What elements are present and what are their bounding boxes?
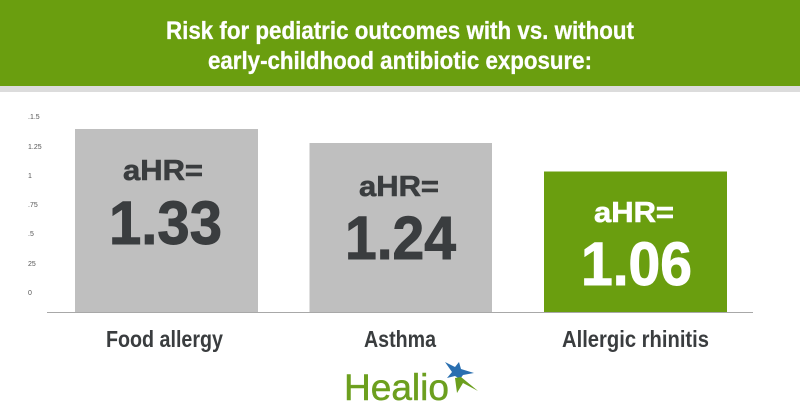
- bar: allergic rhinitis: aHR=: [594, 197, 674, 229]
- y axis labels: 1.25: [28, 144, 42, 151]
- Healio logo: Healio: [344, 367, 449, 408]
- title: early-childhood antibiotic exposure:: [208, 47, 592, 75]
- header banner: [0, 0, 800, 92]
- category label: allergic rhinitis: Allergic rhinitis: [562, 326, 709, 352]
- y axis labels: 25: [28, 261, 36, 268]
- bar: food allergy: [75, 129, 258, 312]
- y axis labels: .1.5: [28, 114, 40, 121]
- y axis labels: [28, 114, 42, 297]
- icon: logo star: [445, 362, 478, 393]
- bar: asthma: 1.24: [345, 204, 456, 272]
- bar: asthma: [310, 143, 492, 312]
- Healio logo: [344, 362, 478, 408]
- bar: allergic rhinitis: 1.06: [581, 230, 692, 298]
- x axis line: [47, 312, 753, 313]
- category label: food allergy: Food allergy: [106, 326, 223, 352]
- bar: food allergy: aHR=: [123, 155, 203, 187]
- category label: asthma: Asthma: [364, 326, 436, 352]
- bar: food allergy: 1.33: [109, 189, 222, 257]
- bar: allergic rhinitis: [544, 172, 727, 312]
- title: Risk for pediatric outcomes with vs. without: [166, 17, 635, 45]
- y axis labels: 0: [28, 290, 32, 297]
- y axis labels: .75: [28, 202, 38, 209]
- bar: asthma: aHR=: [359, 171, 439, 203]
- title: [166, 17, 635, 75]
- y axis labels: 1: [28, 173, 32, 180]
- y axis labels: .5: [28, 231, 34, 238]
